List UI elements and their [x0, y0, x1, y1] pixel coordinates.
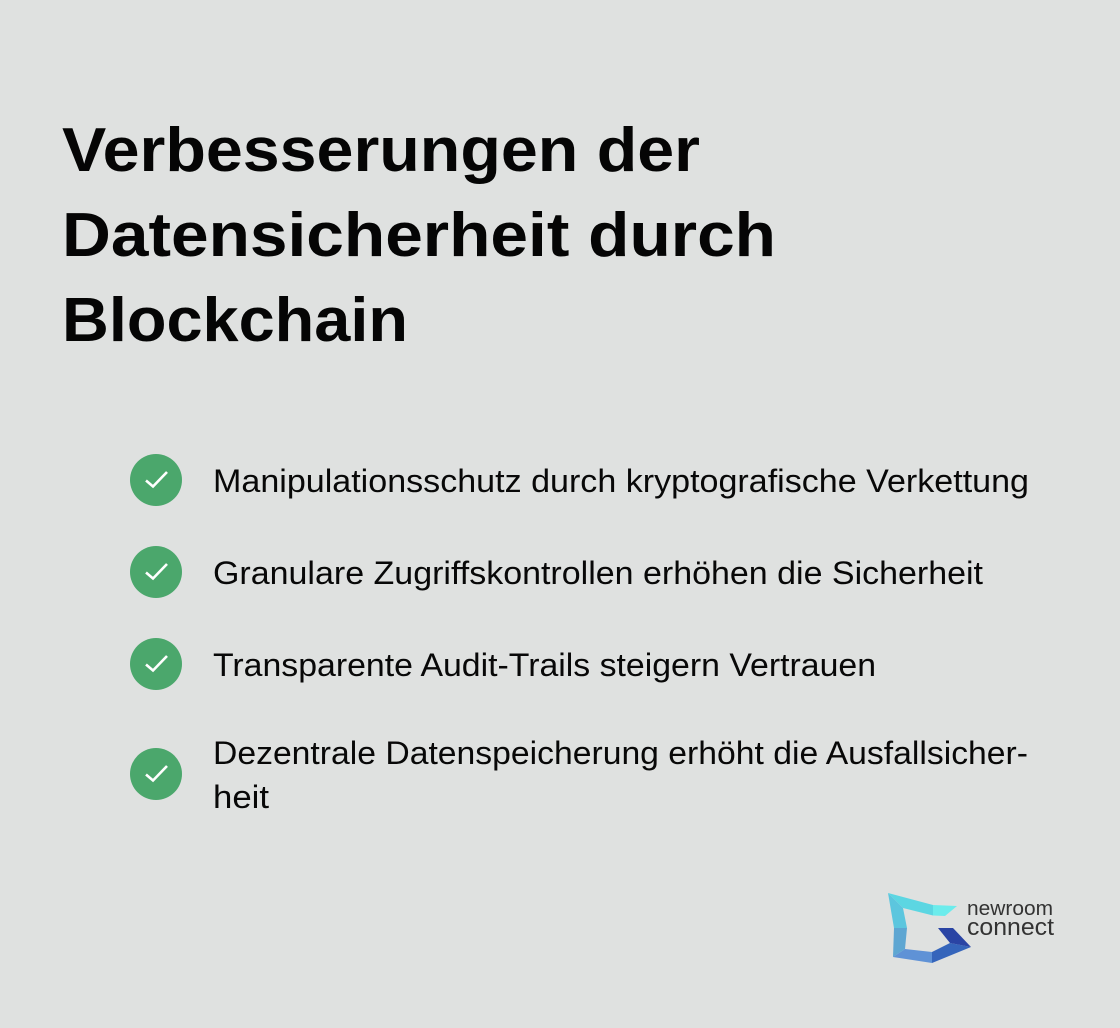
logo: newroom connect: newroom — [967, 898, 1053, 920]
title: Datensicherheit durch — [62, 201, 776, 270]
title: Verbesserungen der — [62, 116, 700, 185]
item: Audit-Trails — [130, 638, 876, 690]
item: Audit-Trails: Transparente Audit-Trails steigern Vertrauen — [213, 647, 876, 683]
item: Manipulationsschutz: Manipulationsschutz durch kryptografische Verkettung — [213, 463, 1029, 499]
item: Zugriffskontrollen — [130, 546, 983, 598]
item: Datenspeicherung — [130, 735, 1028, 815]
logo: newroom connect — [888, 893, 1054, 963]
item: Zugriffskontrollen: Granulare Zugriffskontrollen erhöhen die Sicherheit — [213, 555, 983, 591]
item: Datenspeicherung: heit — [213, 779, 269, 815]
item: Datenspeicherung: Dezentrale Datenspeicherung erhöht die Ausfallsicher- — [213, 735, 1028, 771]
logo: newroom connect: connect — [967, 914, 1054, 941]
title: Blockchain — [62, 286, 408, 355]
item: Manipulationsschutz — [130, 454, 1029, 506]
title — [62, 116, 776, 355]
checklist — [130, 454, 1029, 815]
